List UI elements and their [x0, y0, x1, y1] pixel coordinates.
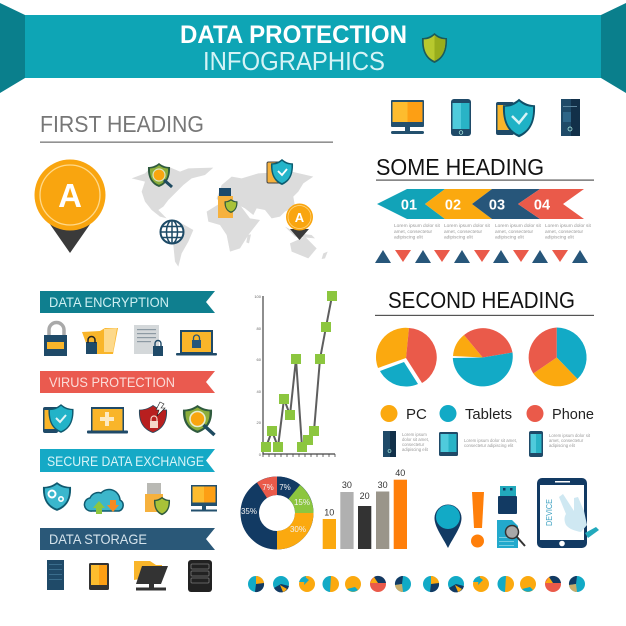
bar labels — [324, 468, 405, 518]
step 03 — [472, 189, 540, 219]
note text 1: consectetur — [402, 442, 425, 447]
bar labels: 10 — [324, 508, 334, 518]
donut labels — [241, 483, 310, 534]
pie chart 3 — [529, 328, 587, 386]
step descriptions: amet, consectetur — [444, 229, 483, 235]
note text 1 — [402, 432, 429, 452]
ribbon: secure data exchange: SECURE DATA EXCHANGE — [47, 453, 204, 469]
donut labels: 7% — [262, 483, 274, 492]
bar labels: 20 — [360, 491, 370, 501]
icon: laptop and lock — [176, 330, 217, 356]
axis labels: 80 — [257, 326, 262, 331]
icon: tablet — [89, 563, 109, 590]
donut labels: 15% — [294, 498, 310, 507]
storage icons — [47, 560, 212, 592]
device label: DEVICE — [545, 499, 554, 526]
icon: server rack — [47, 560, 64, 590]
step descriptions: Lorem ipsum dolor sit — [394, 223, 441, 229]
axis labels — [254, 294, 262, 457]
icon: small map pin — [286, 204, 313, 240]
step descriptions: adipiscing elit — [394, 234, 423, 240]
icon: padlock — [44, 323, 67, 356]
icon: small map pin: A — [295, 210, 305, 225]
world map — [132, 159, 328, 267]
title — [180, 21, 407, 76]
ribbon: secure data exchange — [40, 449, 215, 472]
icon: usb shield on map — [218, 188, 238, 218]
icon: usb with shield — [145, 483, 170, 515]
icon: smartphone — [529, 431, 543, 457]
icon: server tower — [383, 431, 396, 457]
note text 1: dolor sit amet, — [402, 437, 429, 442]
step descriptions: amet, consectetur — [495, 229, 534, 235]
icon: globe on map — [160, 220, 184, 244]
ribbon: data storage: DATA STORAGE — [49, 531, 147, 547]
triangle row — [375, 250, 588, 263]
bar labels: 30 — [342, 480, 352, 490]
axis labels: 60 — [257, 357, 262, 362]
step 04: 04 — [534, 198, 550, 214]
device notes — [383, 431, 591, 457]
step descriptions: Lorem ipsum dolor sit — [545, 223, 592, 229]
donut labels: 35% — [241, 507, 257, 516]
axis labels: 40 — [257, 389, 262, 394]
icon: search shield on map — [148, 163, 172, 187]
icon: location pin — [434, 504, 462, 548]
step descriptions: adipiscing elit — [444, 234, 473, 240]
hand — [559, 494, 599, 538]
icon: usb drive — [498, 486, 517, 514]
note text 3: adipiscing elit — [549, 443, 576, 448]
heading: second heading: SECOND HEADING — [388, 287, 575, 313]
step descriptions: adipiscing elit — [495, 234, 524, 240]
donut chart — [241, 476, 314, 550]
icon: dark server — [188, 560, 212, 592]
legend: pc — [380, 405, 427, 423]
ribbon: virus protection: VIRUS PROTECTION — [49, 374, 175, 390]
icon: cracked red shield — [139, 402, 167, 433]
icon: document and lock — [134, 325, 163, 356]
icon: tablet — [439, 432, 458, 456]
heading: some heading: SOME HEADING — [376, 154, 544, 180]
axis labels: 0 — [259, 452, 262, 457]
step 02 — [425, 189, 492, 219]
icon: search shield — [183, 405, 214, 435]
legend: pc: PC — [406, 406, 427, 423]
step 01 — [377, 189, 445, 219]
legend: tablets: Tablets — [465, 406, 512, 423]
legend: tablets — [440, 405, 512, 423]
encryption icons — [44, 323, 217, 356]
note text 1: adipiscing elit — [402, 447, 429, 452]
step 03: 03 — [489, 198, 505, 214]
icon: tower server — [561, 99, 580, 136]
ribbon: data encryption — [40, 291, 215, 313]
top device icons — [391, 99, 580, 137]
note text 2 — [464, 438, 517, 448]
note text 3: Lorem ipsum dolor sit — [549, 433, 591, 438]
banner — [0, 3, 626, 93]
heading: first heading: FIRST HEADING — [40, 111, 204, 137]
note text 3: amet, consectetur — [549, 438, 584, 443]
icon: tablet device with hand — [537, 478, 599, 548]
protection icons — [43, 402, 214, 435]
title: DATA PROTECTION — [180, 21, 407, 49]
step 02: 02 — [445, 198, 461, 214]
line chart — [254, 291, 337, 457]
pie chart 1 — [376, 328, 437, 387]
icon: folder and lock — [82, 328, 118, 354]
step descriptions: Lorem ipsum dolor sit — [444, 223, 491, 229]
ribbon: data storage — [40, 528, 215, 550]
axis labels: 20 — [257, 420, 262, 425]
legend: phone: Phone — [552, 406, 594, 423]
icon: gear shield — [43, 482, 71, 511]
icon: network monitor — [191, 485, 217, 512]
icon: folder on network — [134, 561, 168, 590]
step descriptions: amet, consectetur — [394, 229, 433, 235]
note text 3 — [549, 433, 591, 448]
step 04 — [518, 189, 584, 219]
icon: monitor — [391, 100, 424, 134]
icon: phone — [451, 99, 471, 136]
step descriptions: adipiscing elit — [545, 234, 574, 240]
step 01: 01 — [401, 198, 417, 214]
icon: phone shield on map — [267, 159, 293, 185]
icon: laptop with plus — [87, 407, 128, 434]
axis labels: 100 — [254, 294, 262, 299]
donut labels: 7% — [279, 483, 291, 492]
bar chart — [323, 468, 407, 549]
donut labels: 30% — [290, 525, 306, 534]
legend: phone — [526, 405, 594, 423]
note text 2: Lorem ipsum dolor sit amet, — [464, 438, 517, 443]
data line — [266, 296, 332, 447]
icon: cloud with arrows — [84, 490, 123, 514]
bar labels: 30 — [378, 480, 388, 490]
icon: exclamation mark — [471, 492, 484, 548]
chart axes — [263, 296, 335, 457]
step descriptions: Lorem ipsum dolor sit — [495, 223, 542, 229]
data points — [261, 291, 337, 452]
icon: phone and shield — [496, 99, 535, 137]
note text 2: consectetur adipiscing elit — [464, 443, 514, 448]
legend — [380, 405, 594, 423]
note text 1: Lorem ipsum — [402, 432, 427, 437]
icon: document with magnifier — [497, 520, 525, 548]
icon: large map pin: A — [58, 177, 82, 214]
title: INFOGRAPHICS — [203, 46, 385, 76]
icon: phone with shield — [43, 404, 74, 433]
ribbon: data encryption: DATA ENCRYPTION — [49, 294, 169, 310]
exchange icons — [43, 482, 217, 515]
icon: title shield — [422, 33, 447, 63]
icon: large map pin — [34, 160, 106, 253]
step descriptions: amet, consectetur — [545, 229, 584, 235]
pie chart 2 — [453, 328, 513, 386]
arrow steps — [377, 189, 584, 219]
small pies row — [248, 576, 585, 592]
ribbon: virus protection — [40, 371, 215, 393]
bar labels: 40 — [395, 468, 405, 478]
step descriptions — [394, 223, 592, 240]
